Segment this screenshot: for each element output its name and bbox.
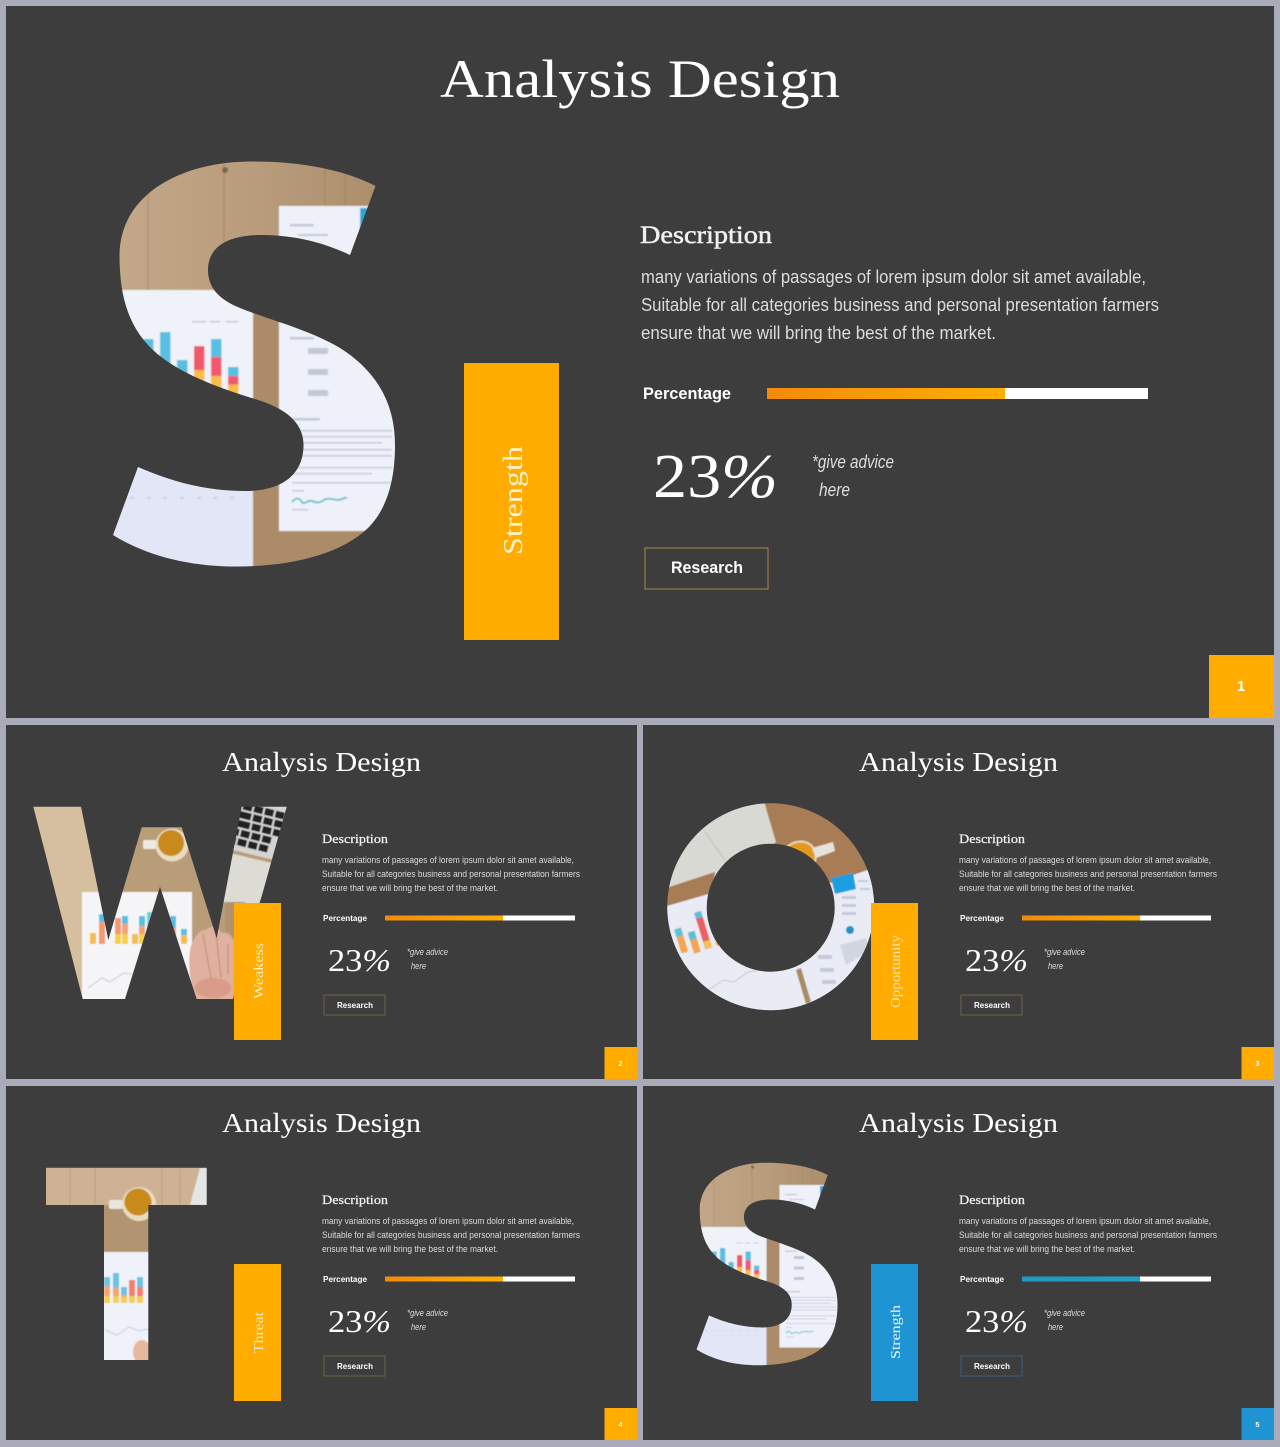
- description body: ensure that we will bring the best of the market.: [641, 323, 996, 343]
- advice note: *give advice: [812, 452, 894, 472]
- percentage label: Percentage: [643, 384, 731, 403]
- percent value: 23%: [328, 942, 391, 978]
- tag: Threat: Threat: [252, 1312, 267, 1353]
- description body: [322, 855, 580, 893]
- wood strip: [796, 968, 811, 1004]
- advice note: here: [1048, 961, 1063, 971]
- page number: 2: [618, 1059, 623, 1068]
- description body: [959, 1216, 1217, 1254]
- letter T photo: [46, 1168, 207, 1360]
- advice note: *give advice: [407, 1308, 448, 1318]
- tag: Opportunity: [871, 903, 918, 1040]
- cup: [787, 842, 816, 868]
- research button: [324, 1356, 385, 1376]
- title: Analysis Design: [222, 1108, 422, 1138]
- cup: [143, 840, 157, 849]
- tag: Threat: [234, 1264, 281, 1401]
- description body: [959, 855, 1217, 893]
- page number: [1242, 1047, 1274, 1079]
- panel: slide 1 Strength: [6, 6, 1274, 718]
- tag: Weakness: Weakess: [252, 943, 267, 999]
- progress bar: [1022, 916, 1211, 920]
- progress bar: [767, 388, 1148, 399]
- panel: slide 5 Strength blue: [643, 1086, 1274, 1440]
- description body: [322, 1216, 580, 1254]
- advice note: [407, 1308, 448, 1332]
- page number: 5: [1255, 1420, 1260, 1429]
- progress bar: [1022, 1276, 1211, 1282]
- tag: Strength: Strength: [889, 1305, 904, 1359]
- research button: [645, 548, 768, 589]
- description body: Suitable for all categories business and personal presentation farmers: [322, 1230, 580, 1240]
- hand: [189, 927, 234, 1001]
- percent value: 23%: [653, 443, 778, 511]
- advice note: [407, 947, 448, 971]
- description body: Suitable for all categories business and personal presentation farmers: [322, 869, 580, 879]
- description body: Suitable for all categories business and personal presentation farmers: [959, 1230, 1217, 1240]
- letter W photo: [30, 800, 292, 1005]
- advice note: here: [819, 480, 850, 500]
- advice note: *give advice: [1044, 1308, 1085, 1318]
- advice note: here: [411, 961, 426, 971]
- tag: Strength: [464, 363, 559, 640]
- laptop: [234, 806, 287, 860]
- advice note: *give advice: [1044, 947, 1085, 957]
- description body: ensure that we will bring the best of the market.: [959, 883, 1135, 893]
- description body: ensure that we will bring the best of the market.: [322, 883, 498, 893]
- bars: [674, 910, 720, 954]
- advice note: [1044, 947, 1085, 971]
- description body: many variations of passages of lorem ipsum dolor sit amet available,: [322, 855, 574, 865]
- percentage label: Percentage: [960, 1274, 1004, 1284]
- description body: ensure that we will bring the best of the market.: [322, 1244, 498, 1254]
- blue card: [831, 873, 856, 894]
- panel: slide 4 Threat: [6, 1086, 637, 1440]
- page number: [604, 1408, 637, 1440]
- panel: slide 3 Opportunity: [643, 725, 1274, 1079]
- description body: [641, 267, 1159, 343]
- description heading: Description: [959, 1193, 1026, 1207]
- title: Analysis Design: [222, 747, 422, 777]
- page number: 3: [1255, 1059, 1260, 1068]
- letter S photo small: [690, 1157, 845, 1372]
- description heading: Description: [959, 832, 1026, 846]
- page number: [604, 1047, 637, 1079]
- research button: Research: [974, 1361, 1010, 1371]
- title: Analysis Design: [859, 1108, 1059, 1138]
- page number: 1: [1237, 678, 1245, 695]
- percentage label: Percentage: [323, 1274, 367, 1284]
- tag: Opportunity: Opportunity: [889, 935, 904, 1008]
- description body: ensure that we will bring the best of the market.: [959, 1244, 1135, 1254]
- description heading: Description: [322, 1193, 389, 1207]
- progress bar: [385, 916, 575, 920]
- advice note: here: [411, 1322, 426, 1332]
- panel: slide 2 Weakness: [6, 725, 637, 1079]
- advice note: [1044, 1308, 1085, 1332]
- description body: many variations of passages of lorem ipsum dolor sit amet available,: [959, 855, 1211, 865]
- progress bar: [385, 1276, 575, 1282]
- research button: Research: [671, 558, 743, 577]
- description body: Suitable for all categories business and personal presentation farmers: [959, 869, 1217, 879]
- research button: Research: [337, 1361, 373, 1371]
- description body: Suitable for all categories business and personal presentation farmers: [641, 295, 1159, 315]
- research button: [961, 995, 1022, 1015]
- research button: [961, 1356, 1022, 1376]
- finger: [132, 1340, 148, 1360]
- research button: [324, 995, 385, 1015]
- percent value: 23%: [328, 1303, 391, 1339]
- title: Analysis Design: [440, 49, 840, 109]
- page number: [1209, 655, 1274, 718]
- research button: Research: [974, 1000, 1010, 1010]
- description body: many variations of passages of lorem ipsum dolor sit amet available,: [959, 1216, 1211, 1226]
- letter S photo: [100, 150, 410, 580]
- advice note: here: [1048, 1322, 1063, 1332]
- tag: Strength: [871, 1264, 918, 1401]
- percent value: 23%: [965, 1303, 1028, 1339]
- advice note: [812, 452, 894, 500]
- description body: many variations of passages of lorem ipsum dolor sit amet available,: [322, 1216, 574, 1226]
- description heading: Description: [322, 832, 389, 846]
- research button: Research: [337, 1000, 373, 1010]
- percentage label: Percentage: [323, 913, 367, 923]
- tag: Weakness: [234, 903, 281, 1040]
- page number: 4: [618, 1420, 623, 1429]
- percent value: 23%: [965, 942, 1028, 978]
- description heading: Description: [640, 222, 773, 249]
- description body: many variations of passages of lorem ipsum dolor sit amet available,: [641, 267, 1146, 287]
- cup: [109, 1200, 123, 1209]
- tag: Strength: Strength: [498, 445, 528, 555]
- letter O photo: [667, 803, 874, 1010]
- advice note: *give advice: [407, 947, 448, 957]
- page number: [1242, 1408, 1274, 1440]
- percentage label: Percentage: [960, 913, 1004, 923]
- title: Analysis Design: [859, 747, 1059, 777]
